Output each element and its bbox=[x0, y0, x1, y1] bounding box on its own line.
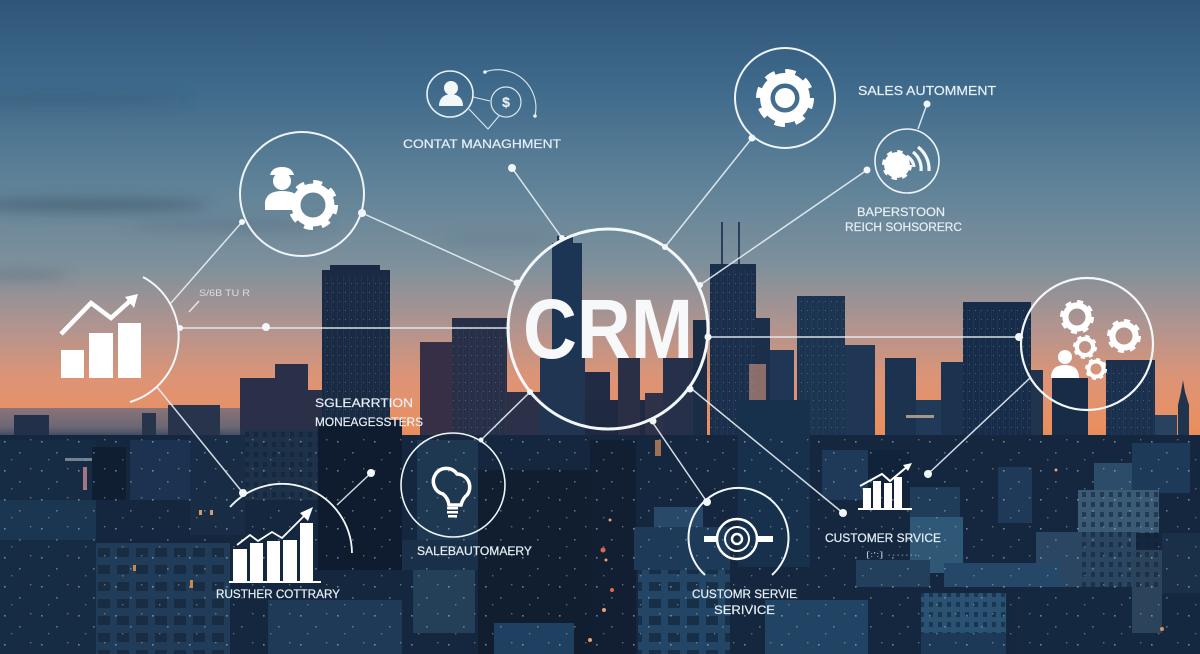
skyline: tall towers bbox=[322, 222, 756, 510]
central hub: CRM bbox=[508, 229, 708, 429]
node: gear bbox=[735, 48, 835, 148]
label: left middle: MONEAGESSTERS bbox=[315, 417, 423, 429]
node: customer service chart bbox=[825, 463, 941, 559]
connector lines bbox=[157, 104, 1030, 513]
city: lower blocks bbox=[0, 400, 1200, 654]
node: contact management bbox=[403, 70, 562, 151]
node: bottom left chart bbox=[216, 484, 352, 601]
background: dusk sky bbox=[0, 0, 1200, 440]
node: light bulb bbox=[401, 433, 532, 558]
node: target: SERIVICE bbox=[714, 605, 775, 617]
node: sales automation: BAPERSTOON bbox=[857, 207, 945, 219]
label: left middle: SGLEARRTION bbox=[315, 398, 413, 410]
node: sales automation: SALES AUTOMMENT bbox=[858, 84, 996, 98]
tower windows bbox=[322, 270, 1155, 505]
node: customer service chart: CUSTOMER SRVICE bbox=[825, 531, 941, 545]
connector nodes bbox=[177, 100, 1023, 517]
node: growth chart bbox=[61, 277, 250, 402]
node: contact management: CONTAT MANAGHMENT bbox=[403, 137, 562, 151]
node: worker and gear bbox=[240, 132, 364, 256]
node: target bbox=[688, 488, 797, 617]
node: sales automation: REICH SOHSORERC bbox=[845, 222, 962, 234]
node: light bulb: SALEBAUTOMAERY bbox=[417, 546, 532, 558]
skyline: far buildings bbox=[14, 296, 1189, 473]
central hub: CRM: CRM bbox=[523, 282, 693, 376]
node: sales automation bbox=[845, 84, 996, 234]
node: target: CUSTOMR SERVIE bbox=[692, 589, 797, 601]
node: growth chart: S/6B TU R bbox=[199, 288, 250, 299]
city: windows and lights bbox=[0, 415, 1200, 654]
node: bottom left chart: RUSTHER COTTRARY bbox=[216, 587, 340, 601]
node: contact management: $ bbox=[502, 94, 510, 110]
node: people and gears bbox=[1021, 278, 1153, 410]
horizon haze bbox=[0, 408, 250, 440]
clouds bbox=[0, 94, 560, 278]
node: customer service chart: [:':] ······· bbox=[866, 550, 918, 559]
label: left middle bbox=[315, 398, 423, 429]
